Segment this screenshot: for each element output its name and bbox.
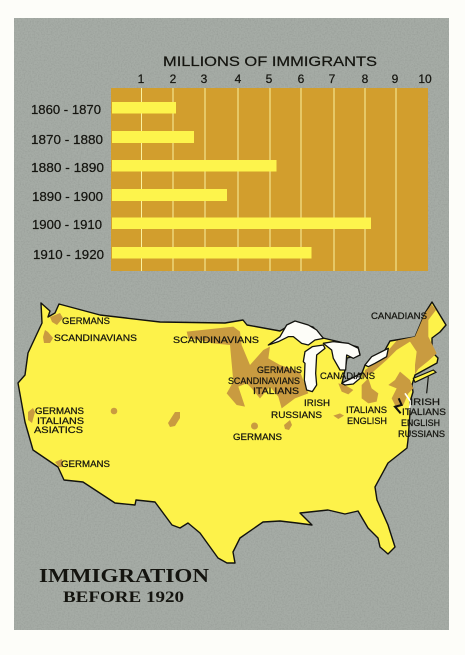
title — [39, 566, 209, 606]
map labels: CANADIANS — [320, 371, 375, 381]
chart axis numbers — [138, 72, 432, 86]
decade labels: 1860 - 1870 — [31, 103, 101, 117]
map labels: IRISH — [304, 398, 330, 408]
chart axis numbers: 1 — [138, 72, 145, 86]
map labels: CANADIANS — [371, 311, 427, 321]
map labels: IRISH — [410, 397, 440, 407]
lake: Erie — [342, 373, 362, 385]
map labels: SCANDINAVIANS — [54, 333, 137, 343]
area: California settlements — [28, 408, 63, 467]
chart axis numbers: 4 — [235, 72, 242, 86]
map labels: ITALIANS — [253, 386, 299, 396]
area: Pennsylvania and New Jersey — [388, 372, 413, 408]
chart axis numbers: 6 — [298, 72, 305, 86]
map labels: ENGLISH — [401, 418, 440, 428]
map labels: ITALIANS — [402, 407, 446, 417]
map labels: RUSSIANS — [398, 429, 445, 439]
area: northeast band — [363, 304, 437, 378]
chart axis numbers: 10 — [418, 72, 432, 86]
chart axis numbers: 7 — [329, 72, 336, 86]
bar chart: immigrants per decade — [111, 88, 428, 271]
map labels: GERMANS — [62, 316, 110, 326]
map labels: ASIATICS — [34, 425, 83, 435]
chart axis numbers: 8 — [362, 72, 369, 86]
area: interior spots — [111, 408, 292, 430]
decade labels: 1890 - 1900 — [32, 190, 103, 204]
map labels: GERMANS — [61, 459, 110, 469]
map labels: GERMANS — [35, 406, 84, 416]
area: northwest settlements — [43, 313, 63, 343]
map labels: GERMANS — [257, 365, 302, 375]
decade labels: 1900 - 1910 — [32, 218, 102, 232]
map labels: SCANDINAVIANS — [173, 335, 259, 345]
chart axis numbers: 9 — [392, 72, 399, 86]
title: BEFORE 1920 — [63, 589, 184, 606]
decade labels: 1870 - 1880 — [31, 133, 103, 147]
map labels: ITALIANS — [346, 405, 387, 415]
map: Great Lakes — [268, 321, 388, 392]
map: United States outline — [18, 302, 446, 563]
chart axis numbers: 3 — [201, 72, 208, 86]
map labels: SCANDINAVIANS — [228, 376, 300, 386]
map labels: GERMANS — [233, 432, 282, 442]
area: Ohio and Indiana blobs — [333, 378, 378, 419]
title: IMMIGRATION — [39, 566, 209, 587]
decade labels — [31, 103, 104, 262]
map labels — [34, 311, 446, 469]
map labels: ITALIANS — [37, 416, 84, 426]
chart axis numbers: 2 — [170, 72, 177, 86]
decade labels: 1910 - 1920 — [33, 248, 104, 262]
map labels: RUSSIANS — [271, 410, 322, 420]
chart axis numbers: 5 — [266, 72, 273, 86]
map labels: ENGLISH — [347, 416, 387, 426]
map: settlement areas — [28, 304, 437, 467]
area: upper midwest band — [187, 327, 308, 408]
lake: Michigan — [303, 345, 325, 392]
lake: Ontario — [365, 348, 388, 367]
east coast inlets and arrow — [395, 370, 436, 413]
lake: Superior — [268, 321, 323, 345]
decade labels: 1880 - 1890 — [31, 161, 104, 175]
lake: Huron — [323, 342, 360, 370]
chart heading: MILLIONS OF IMMIGRANTS — [163, 53, 377, 69]
